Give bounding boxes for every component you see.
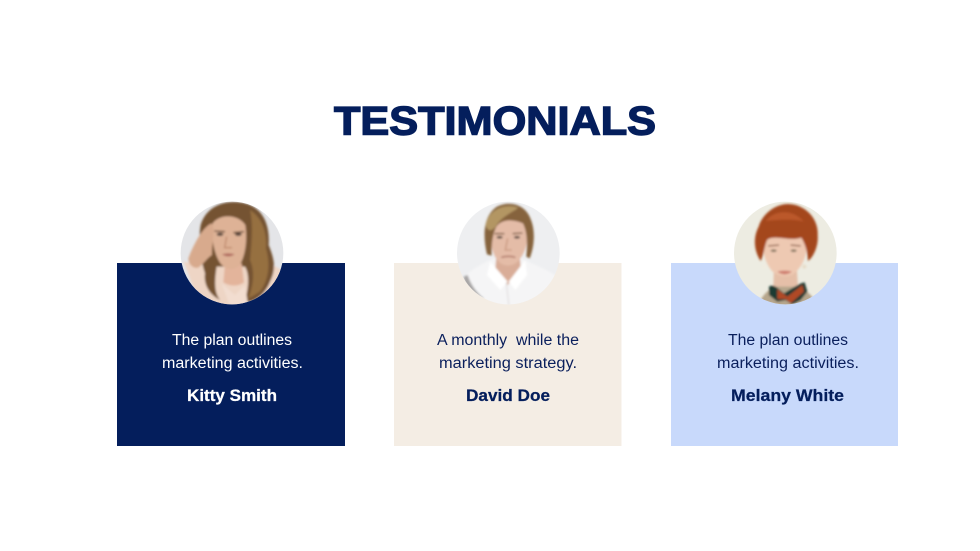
title: TESTIMONIALS	[334, 99, 656, 143]
testimonial text: marketing strategy.	[439, 355, 577, 372]
panel: David Doe testimonial	[394, 198, 622, 446]
testimonial text	[717, 332, 859, 372]
testimonial text: marketing activities.	[717, 355, 859, 372]
name: David Doe	[466, 386, 550, 405]
portrait: Melany White	[734, 202, 837, 304]
testimonial text	[162, 332, 303, 372]
testimonial text: marketing activities.	[162, 355, 303, 372]
name: Melany White	[731, 386, 844, 405]
portrait: Kitty Smith	[180, 202, 284, 304]
portrait: David Doe	[457, 202, 560, 304]
panel: Melany White testimonial	[671, 198, 898, 446]
testimonial text: The plan outlines	[172, 332, 292, 349]
name: Kitty Smith	[187, 386, 277, 405]
card background: beige	[394, 263, 622, 446]
panel: Kitty Smith testimonial	[117, 198, 345, 446]
card background: light blue	[671, 263, 898, 446]
testimonial text: A monthly while the	[437, 332, 579, 349]
testimonial text: The plan outlines	[728, 332, 848, 349]
testimonial text	[437, 332, 579, 372]
card background: navy	[117, 263, 345, 446]
